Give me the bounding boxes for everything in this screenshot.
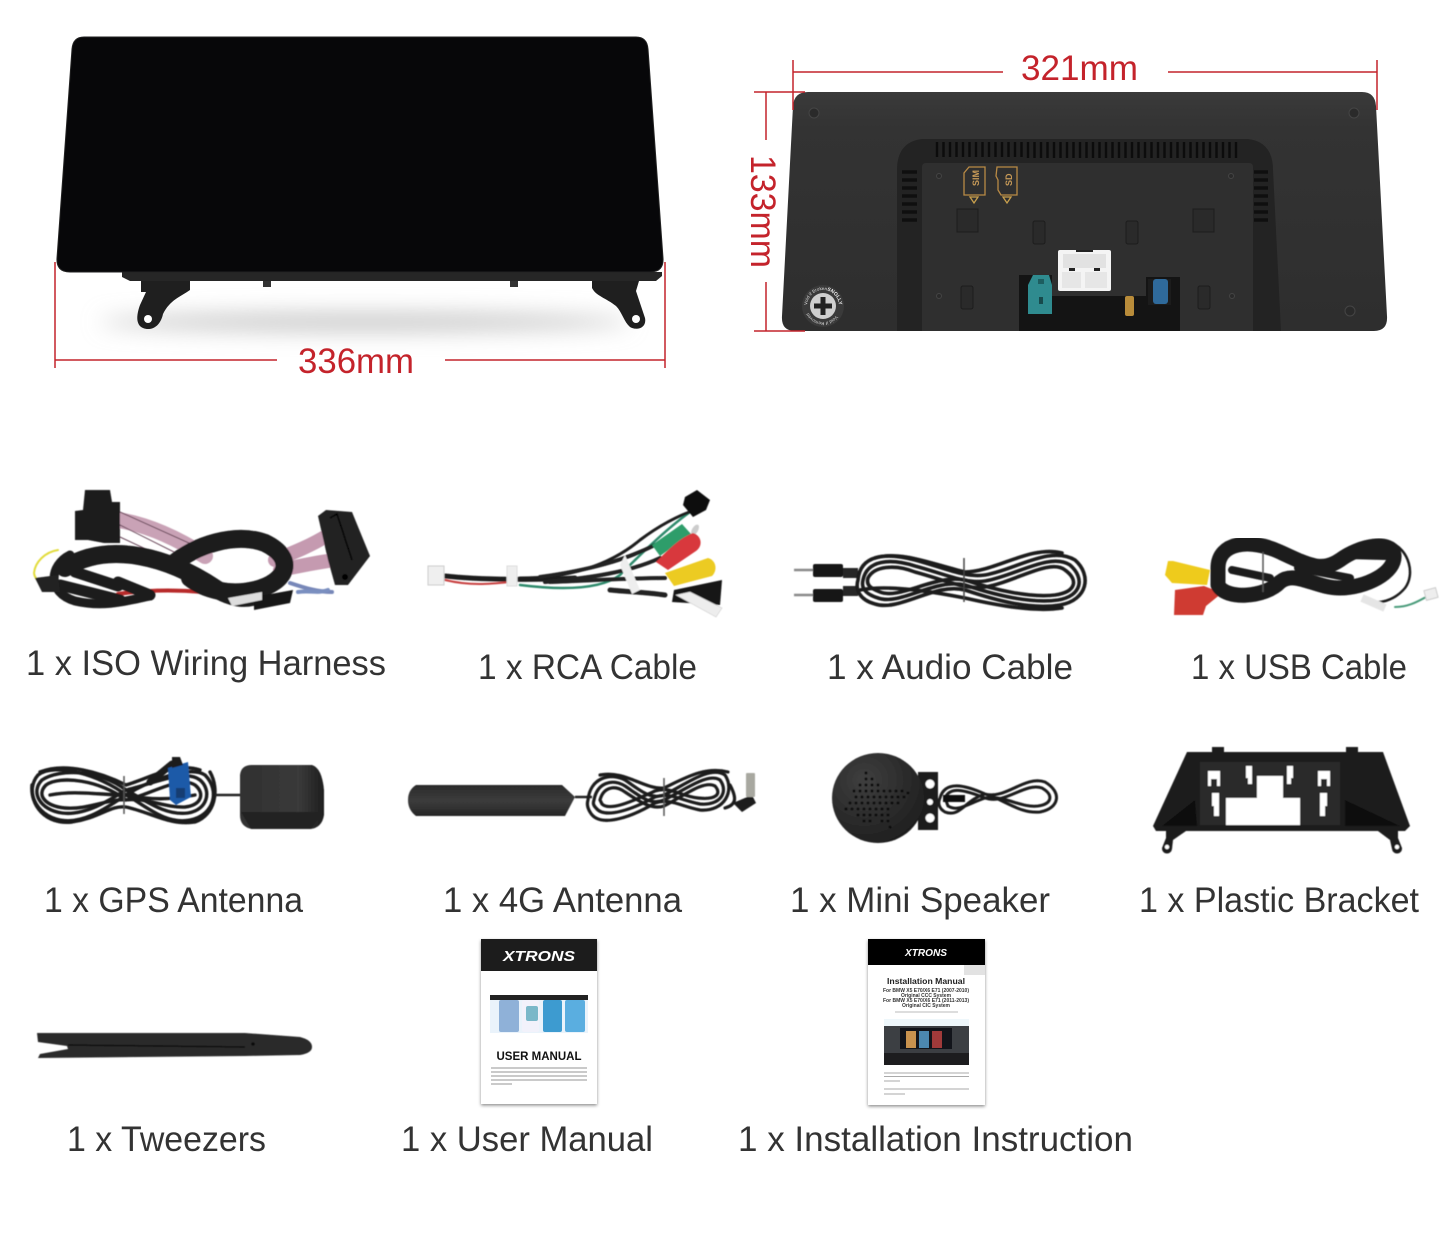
rear housing	[782, 92, 1387, 331]
icon: SD slot: SD	[1004, 173, 1014, 186]
icon: audio cable	[794, 552, 1085, 609]
label: ISO wiring harness: 1 x ISO Wiring Harness	[26, 644, 386, 683]
label: RCA cable: 1 x RCA Cable	[478, 648, 697, 687]
dimension label: 321mm: 321mm	[1021, 49, 1138, 88]
label: USB cable: 1 x USB Cable	[1191, 648, 1407, 687]
icon: installation manual booklet: Original CIC System	[902, 1003, 951, 1009]
icon: installation manual booklet	[868, 939, 985, 1105]
dimension line: 133mm	[754, 92, 805, 331]
item: ISO wiring harness	[26, 490, 386, 683]
icon: installation manual booklet: For BMW X5 E70/X6 E71 (2011-2013)	[883, 998, 969, 1004]
label: GPS antenna: 1 x GPS Antenna	[44, 881, 304, 920]
icon: SIM slot	[964, 167, 985, 203]
warranty sticker: SNOLLY	[827, 288, 842, 304]
icon: ISO wiring harness	[34, 490, 370, 610]
speaker grille dots	[844, 772, 910, 828]
white main connector	[1058, 250, 1111, 291]
side vents	[902, 172, 1268, 220]
icon: user manual booklet: USER MANUAL	[496, 1051, 582, 1063]
label: plastic bracket: 1 x Plastic Bracket	[1139, 881, 1419, 920]
icon: installation manual booklet: For BMW X5 E70/X6 E71 (2007-2010)	[883, 988, 969, 994]
warranty sticker	[802, 285, 844, 327]
label: audio cable: 1 x Audio Cable	[827, 648, 1073, 687]
item: audio cable	[794, 552, 1085, 687]
warranty sticker: Void if Broken	[804, 286, 827, 305]
icon: installation manual booklet: XTRONS	[904, 948, 947, 959]
top vents	[937, 142, 1236, 158]
item: 4G antenna	[408, 770, 756, 920]
icon: screen mounting brackets	[137, 280, 645, 329]
label: mini speaker: 1 x Mini Speaker	[790, 881, 1050, 920]
icon: USB cable	[1165, 542, 1438, 615]
teal connector	[1028, 275, 1052, 314]
inner plate	[922, 163, 1253, 331]
panel: rear view with 321mm and 133mm dimensions	[743, 49, 1388, 332]
item: USB cable	[1165, 542, 1438, 687]
icon: RCA cable	[428, 490, 722, 617]
warranty sticker: Void if Removed	[806, 313, 838, 326]
icon: GPS antenna	[32, 757, 324, 829]
icon: SD slot	[996, 167, 1017, 203]
mounting recesses	[957, 209, 1214, 309]
icon: mini speaker	[832, 753, 1056, 843]
label: user manual: 1 x User Manual	[401, 1120, 653, 1159]
icon: tweezers	[37, 1033, 312, 1058]
icon: plastic bracket	[1153, 747, 1410, 854]
icon: installation manual booklet: Installation Manual	[887, 977, 965, 986]
icon: user manual booklet: XTRONS	[502, 948, 575, 965]
icon: installation manual booklet: Original CCC System	[901, 993, 952, 999]
icon: user manual booklet	[481, 939, 597, 1104]
item: RCA cable	[428, 490, 722, 687]
item: plastic bracket	[1139, 747, 1419, 920]
gold antenna connector	[1125, 296, 1134, 316]
item: GPS antenna	[32, 757, 324, 920]
dimension label: 133mm: 133mm	[743, 155, 782, 268]
icon: SIM slot: SIM	[971, 170, 981, 186]
screen glass	[57, 37, 663, 272]
label: tweezers: 1 x Tweezers	[67, 1120, 266, 1159]
icon: 4G antenna	[408, 770, 756, 820]
dimension line: 321mm	[793, 60, 1377, 110]
panel: front view with 336mm width	[55, 37, 665, 381]
dimension line: 336mm	[55, 262, 665, 368]
rear recess	[897, 139, 1281, 331]
dimension label: 336mm: 336mm	[298, 342, 414, 381]
blue connector	[1148, 279, 1171, 305]
item: tweezers	[37, 1033, 312, 1159]
item: user manual	[401, 939, 653, 1159]
label: installation instruction: 1 x Installation Instruction	[738, 1120, 1133, 1159]
screen back rail	[122, 272, 662, 281]
floor shadow	[100, 313, 630, 331]
cutout for connectors	[1019, 275, 1180, 331]
item: installation instruction	[738, 939, 1133, 1159]
item: mini speaker	[790, 753, 1056, 920]
screws	[809, 108, 1359, 316]
label: 4G antenna: 1 x 4G Antenna	[443, 881, 683, 920]
